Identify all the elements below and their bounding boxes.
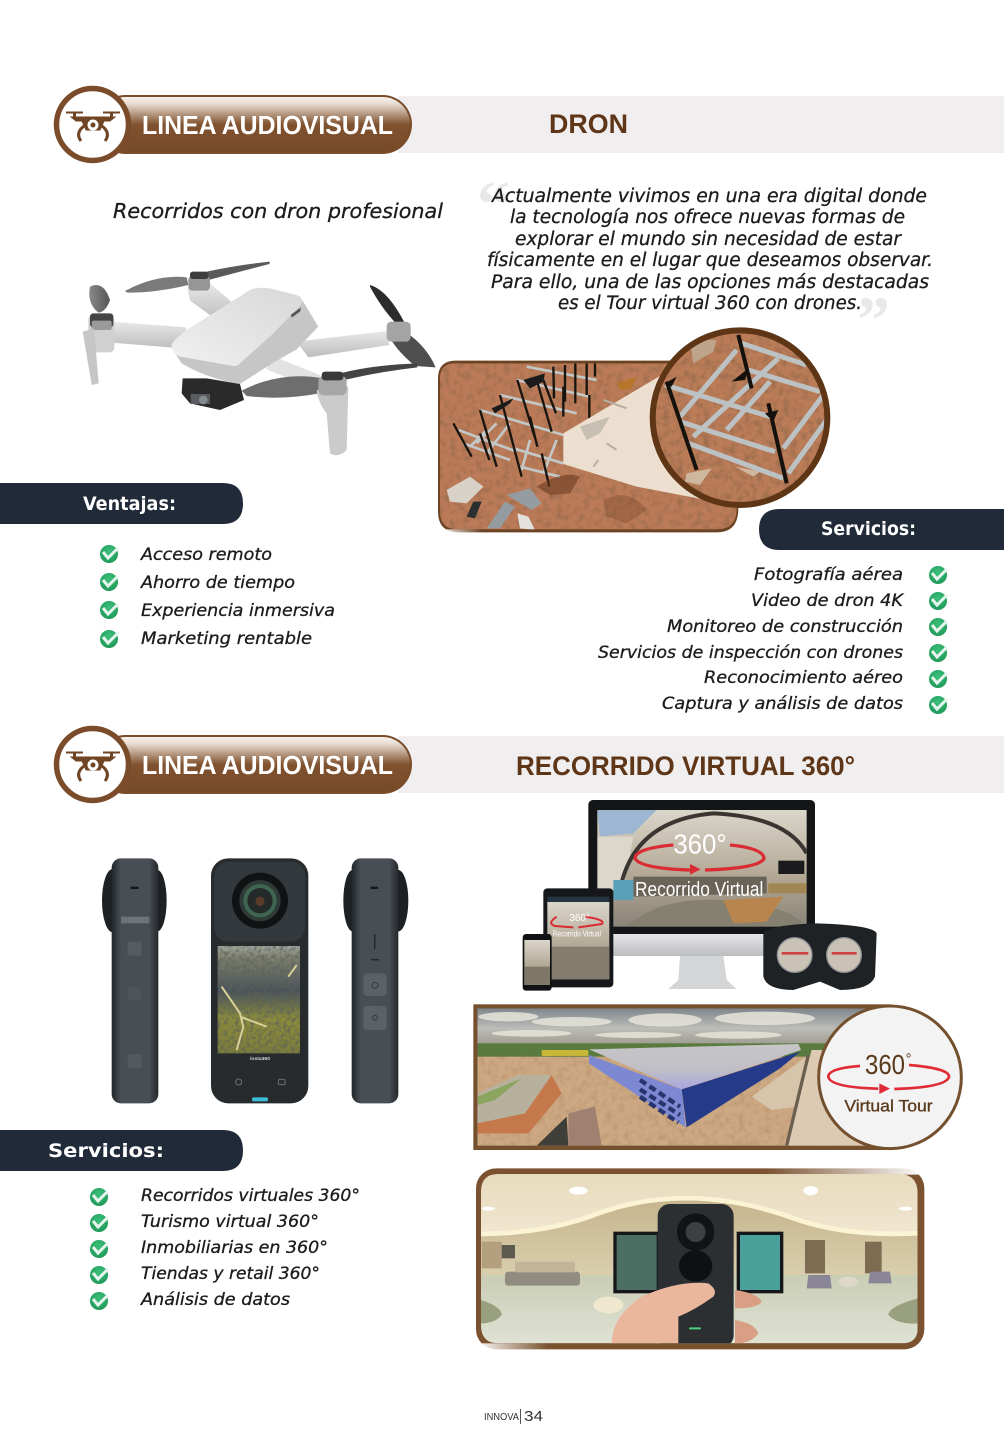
icon: drone badge bottom <box>56 728 128 800</box>
photo: 360 cameras <box>102 858 408 1103</box>
list: servicios dron <box>598 565 947 714</box>
quote block: explorar el mundo sin necesidad de estar <box>515 229 902 250</box>
list: ventajas: Ahorro de tiempo <box>140 573 295 592</box>
list: servicios 360: Turismo virtual 360° <box>141 1212 319 1231</box>
servicios bar: 360 <box>0 1130 243 1171</box>
servicios bar: 360: Servicios: <box>48 1140 164 1162</box>
photo: devices showing virtual tour: 360° <box>569 913 590 924</box>
photo: construction site with zoom lens <box>438 328 830 533</box>
quote block: la tecnología nos ofrece nuevas formas de <box>510 207 905 228</box>
photo: devices showing virtual tour <box>523 800 877 991</box>
photo: construction panorama with 360 badge: Virtual Tour <box>844 1096 933 1115</box>
footer: logo and page number: INNOVA <box>484 1412 519 1423</box>
list: servicios dron: Servicios de inspección con drones <box>598 643 903 662</box>
servicios bar: dron <box>759 509 1004 550</box>
list: servicios dron: Reconocimiento aéreo <box>704 668 903 687</box>
photo: devices showing virtual tour: Recorrido Virtual <box>635 879 763 901</box>
photo: construction panorama with 360 badge: 360 <box>865 1049 905 1080</box>
list: servicios dron: Fotografía aérea <box>754 565 903 584</box>
list: servicios 360: Recorridos virtuales 360° <box>141 1186 360 1205</box>
ventajas bar <box>0 483 243 524</box>
footer: logo and page number <box>484 1408 543 1425</box>
photo: drone <box>83 262 436 455</box>
header band: recorrido virtual <box>398 736 1004 793</box>
photo: devices showing virtual tour: Recorrido Virtual <box>553 930 601 939</box>
ventajas bar: Ventajas: <box>83 493 176 515</box>
title: recorrido virtual 360: RECORRIDO VIRTUAL 360° <box>516 751 855 781</box>
list: servicios 360: Análisis de datos <box>140 1290 290 1309</box>
header pill: linea audiovisual: LINEA AUDIOVISUAL <box>142 110 393 140</box>
quote block: físicamente en el lugar que deseamos observar. <box>487 250 933 271</box>
photo: construction panorama with 360 badge: ° <box>906 1051 912 1067</box>
footer: logo and page number: 34 <box>524 1408 543 1425</box>
icon: drone badge top <box>56 88 128 160</box>
photo: devices showing virtual tour: 360° <box>673 828 727 859</box>
quote block: Para ello, una de las opciones más destacadas <box>491 272 929 293</box>
header pill: linea audiovisual 2: LINEA AUDIOVISUAL <box>142 750 393 780</box>
photo: 360 cameras: insta360 <box>250 1056 270 1062</box>
photo: panoramic interior with hand-held camera <box>475 1167 925 1351</box>
header pill: linea audiovisual <box>96 95 412 154</box>
list: servicios 360: Inmobiliarias en 360° <box>141 1238 328 1257</box>
list: servicios dron: Captura y análisis de datos <box>662 694 903 713</box>
list: servicios 360 <box>90 1186 360 1310</box>
list: servicios dron: Video de dron 4K <box>751 591 904 610</box>
list: ventajas: Experiencia inmersiva <box>141 601 335 620</box>
servicios bar: dron: Servicios: <box>821 518 916 540</box>
quote block: es el Tour virtual 360 con drones. <box>558 293 862 314</box>
list: ventajas: Acceso remoto <box>140 545 272 564</box>
header pill: linea audiovisual 2 <box>96 735 412 794</box>
list: servicios dron: Monitoreo de construcción <box>667 617 903 636</box>
list: servicios 360: Tiendas y retail 360° <box>141 1264 320 1283</box>
subtitle: recorridos con dron profesional: Recorridos con dron profesional <box>113 199 443 223</box>
list: ventajas <box>100 545 335 648</box>
title: dron: DRON <box>549 109 628 139</box>
quote block: “ <box>477 168 510 241</box>
header band: dron <box>398 96 1004 153</box>
quote block: ” <box>857 284 890 357</box>
list: ventajas: Marketing rentable <box>141 629 312 648</box>
quote block <box>477 168 933 357</box>
quote block: Actualmente vivimos en una era digital donde <box>491 186 927 207</box>
photo: construction panorama with 360 badge <box>473 1004 961 1150</box>
